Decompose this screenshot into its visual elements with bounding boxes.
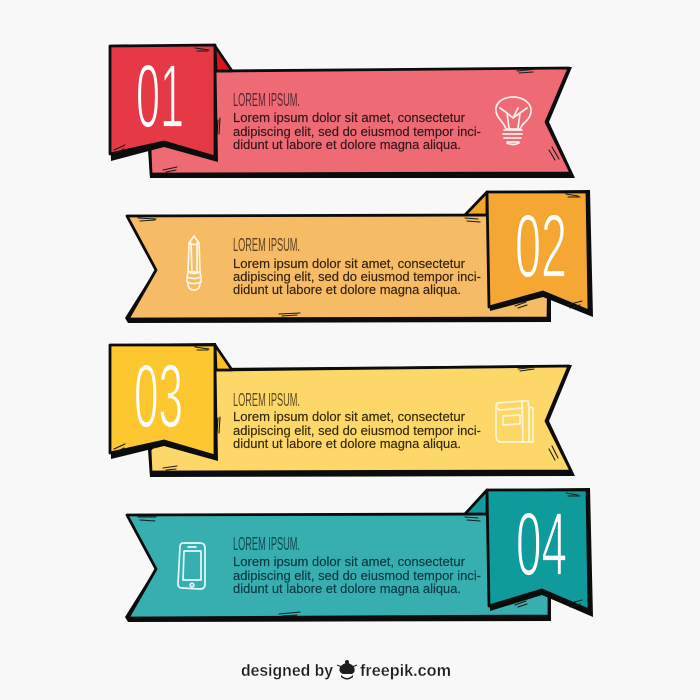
- body 02: didunt ut labore et dolore magna aliqua.: [233, 283, 461, 297]
- icon: light bulb: [496, 97, 531, 144]
- flag 03: [109, 343, 218, 461]
- body 03: didunt ut labore et dolore magna aliqua.: [233, 437, 461, 451]
- heading 04: LOREM IPSUM.: [233, 534, 300, 554]
- fold 01: [215, 46, 232, 71]
- credit text: designed by: designed by: [241, 661, 334, 680]
- panel: ribbon 01: 01: [136, 47, 184, 147]
- ribbon body 01: [148, 67, 575, 178]
- fold 02: [465, 192, 487, 215]
- ribbon body 04: [125, 513, 551, 622]
- text block 04: [233, 534, 481, 596]
- body 03: adipiscing elit, sed do eiusmod tempor inci-: [233, 424, 481, 438]
- icon: freepik logo: [337, 660, 357, 680]
- ribbon body 02: [125, 214, 551, 323]
- footer credit: [241, 660, 451, 680]
- icon: book: [496, 401, 533, 442]
- text block 02: [233, 235, 481, 297]
- panel: ribbon 01: [109, 44, 575, 178]
- body 02: Lorem ipsum dolor sit amet, consectetur: [233, 257, 465, 271]
- heading 03: LOREM IPSUM.: [233, 390, 300, 410]
- number 02: 02: [515, 197, 567, 297]
- body 01: [233, 111, 481, 152]
- flag 01: [109, 44, 218, 162]
- text block 03: [233, 390, 481, 451]
- flag 04: [486, 488, 593, 617]
- flag 02: [486, 190, 593, 317]
- icon: smartphone: [178, 543, 205, 589]
- credit text: freepik.com: freepik.com: [360, 661, 451, 680]
- panel: ribbon 03: [109, 343, 575, 477]
- body 04: didunt ut labore et dolore magna aliqua.: [233, 582, 461, 596]
- body 01: didunt ut labore et dolore magna aliqua.: [233, 138, 461, 152]
- body 04: adipiscing elit, sed do eiusmod tempor inci-: [233, 569, 481, 583]
- heading 02: LOREM IPSUM.: [233, 235, 300, 255]
- panel: ribbon 04: [125, 488, 593, 622]
- body 02: adipiscing elit, sed do eiusmod tempor inci-: [233, 270, 481, 284]
- ribbon body 03: [148, 365, 575, 477]
- body 03: Lorem ipsum dolor sit amet, consectetur: [233, 410, 465, 424]
- fold 04: [465, 490, 487, 514]
- body 03: [233, 410, 481, 451]
- panel: ribbon 03: 03: [134, 347, 183, 447]
- fold 03: [215, 345, 232, 370]
- text block 01: [233, 90, 481, 152]
- body 01: Lorem ipsum dolor sit amet, consectetur: [233, 111, 465, 125]
- number 04: 04: [516, 495, 567, 595]
- body 04: [233, 555, 481, 596]
- icon: pencil: [187, 236, 201, 290]
- body 02: [233, 257, 481, 297]
- body 04: Lorem ipsum dolor sit amet, consectetur: [233, 555, 465, 569]
- body 01: adipiscing elit, sed do eiusmod tempor inci-: [233, 125, 481, 139]
- heading 01: LOREM IPSUM.: [233, 90, 300, 110]
- panel: ribbon 02: [125, 190, 593, 323]
